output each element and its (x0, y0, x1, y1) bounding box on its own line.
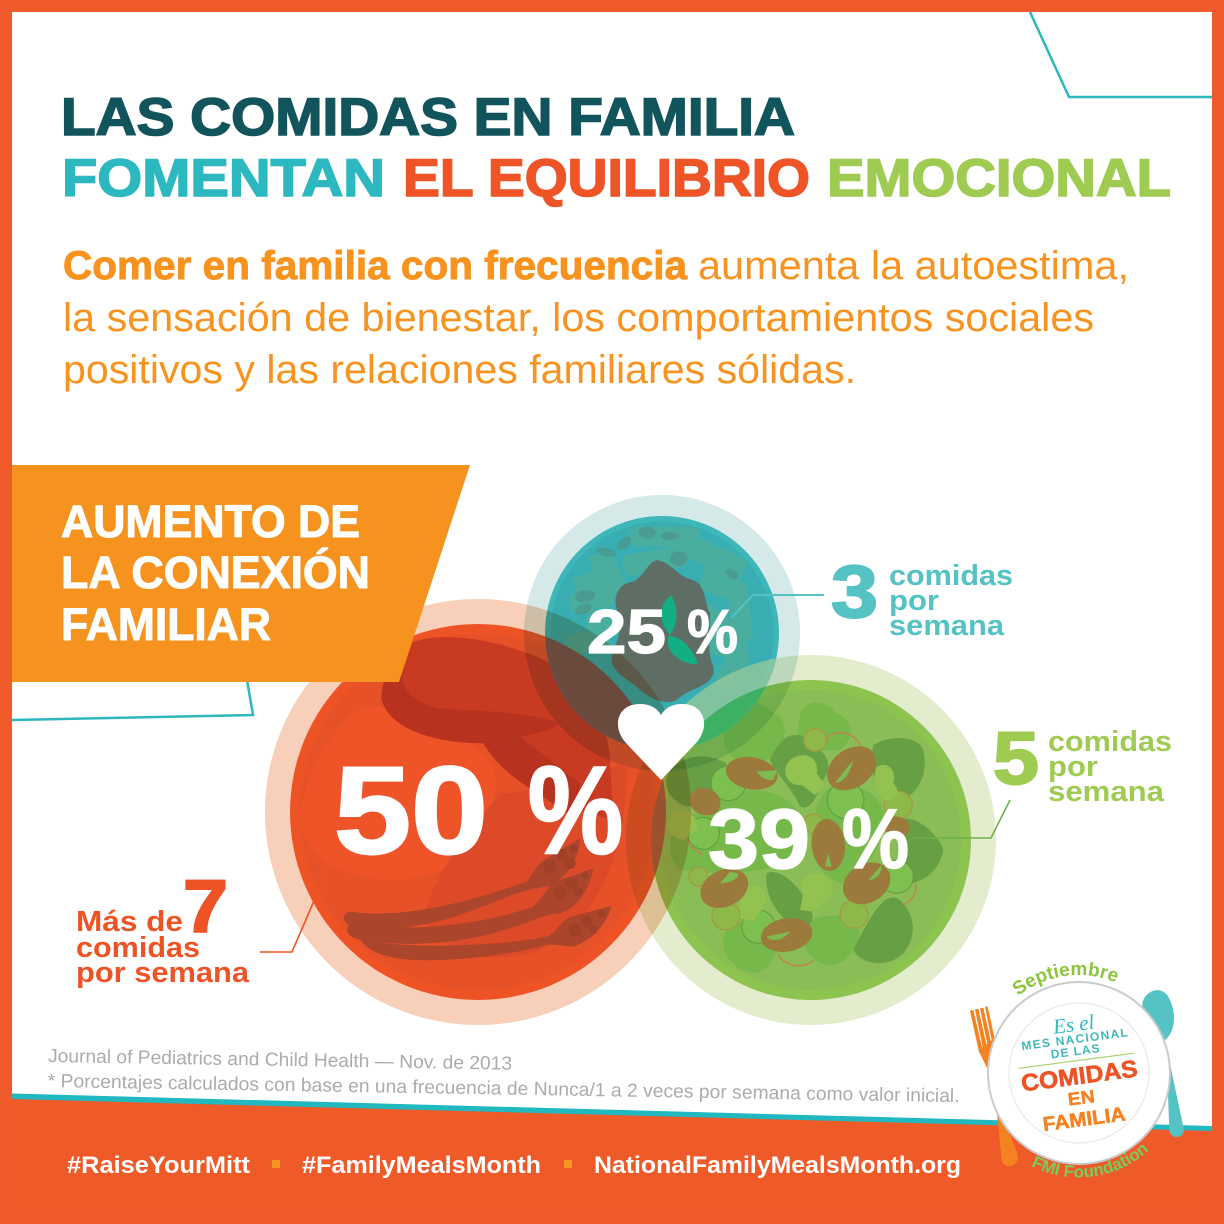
footer hashtag: raise your mitt: #RaiseYourMitt (67, 1152, 250, 1179)
plate text: COMIDAS (1020, 1055, 1139, 1097)
plate (988, 982, 1170, 1164)
label: 3 comidas por semana: por (889, 585, 939, 617)
venn diagram of plates (278, 506, 996, 1025)
banner: aumento de la conexion familiar (12, 465, 470, 682)
label: 3 comidas por semana: semana (889, 610, 1005, 642)
footer separator (272, 1160, 280, 1168)
plate inner rim (1009, 1003, 1149, 1143)
percentage 25 (587, 598, 738, 667)
arc text: septiembre: Septiembre (1012, 962, 1118, 994)
title word: emocional: EMOCIONAL (827, 149, 1171, 208)
intro bold phrase: Comer en familia con frecuencia (63, 244, 688, 288)
footer band (12, 1094, 1212, 1224)
source notes: * Porcentajes calculados con base en una frecuencia de Nunca/1 a 2 veces por semana como valor inicial. (48, 1071, 960, 1107)
label: mas de 7 comidas por semana: 7 (183, 865, 228, 948)
overlap: teal and green plates (693, 686, 766, 746)
leader line: 5 meals (913, 800, 1010, 838)
plate text (1013, 1005, 1145, 1138)
percentage 50 (334, 742, 623, 880)
red plate: chicken and asparagus (290, 624, 666, 1000)
leader line: 3 meals (732, 595, 824, 617)
source notes (48, 1046, 960, 1107)
percentage 39 (708, 792, 909, 886)
label: mas de 7 comidas por semana: Más de (76, 906, 183, 938)
label: 5 comidas por semana: 5 (993, 717, 1039, 800)
intro text (63, 244, 1129, 392)
banner text: AUMENTO DE (61, 496, 360, 547)
title words: el equilibrio: EL EQUILIBRIO (403, 149, 810, 208)
plate text: FAMILIA (1042, 1103, 1127, 1136)
badge: national family meals month (970, 962, 1184, 1178)
overlap: red and green plates (651, 779, 666, 875)
source notes: Journal of Pediatrics and Child Health — Nov. de 2013 (48, 1046, 512, 1075)
arc text: fmi foundation: FMI Foundation (1032, 1145, 1148, 1178)
banner text: LA CONEXIÓN (61, 547, 370, 598)
overlap: teal and green ring (685, 658, 776, 746)
label: mas de 7 comidas por semana: comidas (76, 932, 200, 964)
percentage 50: 50 (334, 742, 488, 880)
footer hashtag: family meals month: #FamilyMealsMonth (302, 1152, 541, 1179)
green plate: salad (651, 680, 971, 1000)
footer url: NationalFamilyMealsMonth.org (594, 1152, 961, 1179)
intro line 3: positivos y las relaciones familiares sólidas. (63, 348, 856, 392)
icon: fork (970, 1007, 1018, 1166)
overlap: teal and red plates (545, 636, 632, 745)
label: mas de 7 comidas por semana (76, 865, 250, 989)
label: 3 comidas por semana: 3 (831, 550, 878, 633)
label: 3 comidas por semana (831, 550, 1013, 642)
leader line: 7 meals (260, 845, 338, 952)
plate text: MES NACIONAL (1021, 1025, 1129, 1053)
label: 5 comidas por semana: comidas (1048, 726, 1172, 758)
percentage 50: % (528, 742, 623, 880)
icon: spoon (1142, 990, 1184, 1137)
footer separator (564, 1160, 572, 1168)
intro line 1 remainder: aumenta la autoestima, (698, 244, 1129, 288)
left accent line under banner (12, 680, 253, 720)
teal plate: pasta (545, 516, 779, 750)
percentage 39: % (842, 792, 909, 886)
percentage 25: 25 (587, 598, 666, 667)
label: mas de 7 comidas por semana: por semana (76, 957, 250, 989)
title (61, 88, 1171, 208)
icon: heart (618, 704, 704, 780)
intro line 2: la sensación de bienestar, los comportamientos sociales (63, 296, 1094, 340)
percentage 39: 39 (708, 792, 810, 886)
banner text: FAMILIAR (61, 599, 271, 650)
title word: fomentan: FOMENTAN (62, 149, 385, 208)
percentage 25: % (687, 598, 738, 667)
plate text: DE LAS (1050, 1041, 1100, 1061)
top right accent line (1030, 12, 1212, 97)
label: 3 comidas por semana: comidas (889, 560, 1013, 592)
title line 1: LAS COMIDAS EN FAMILIA (61, 88, 795, 147)
plate text: EN (1067, 1086, 1096, 1110)
label: 5 comidas por semana: por (1048, 751, 1098, 783)
label: 5 comidas por semana: semana (1048, 776, 1165, 808)
plate rings (278, 506, 984, 1012)
label: 5 comidas por semana (993, 717, 1172, 808)
banner text (61, 496, 370, 650)
plate text: Es el (1051, 1010, 1096, 1039)
